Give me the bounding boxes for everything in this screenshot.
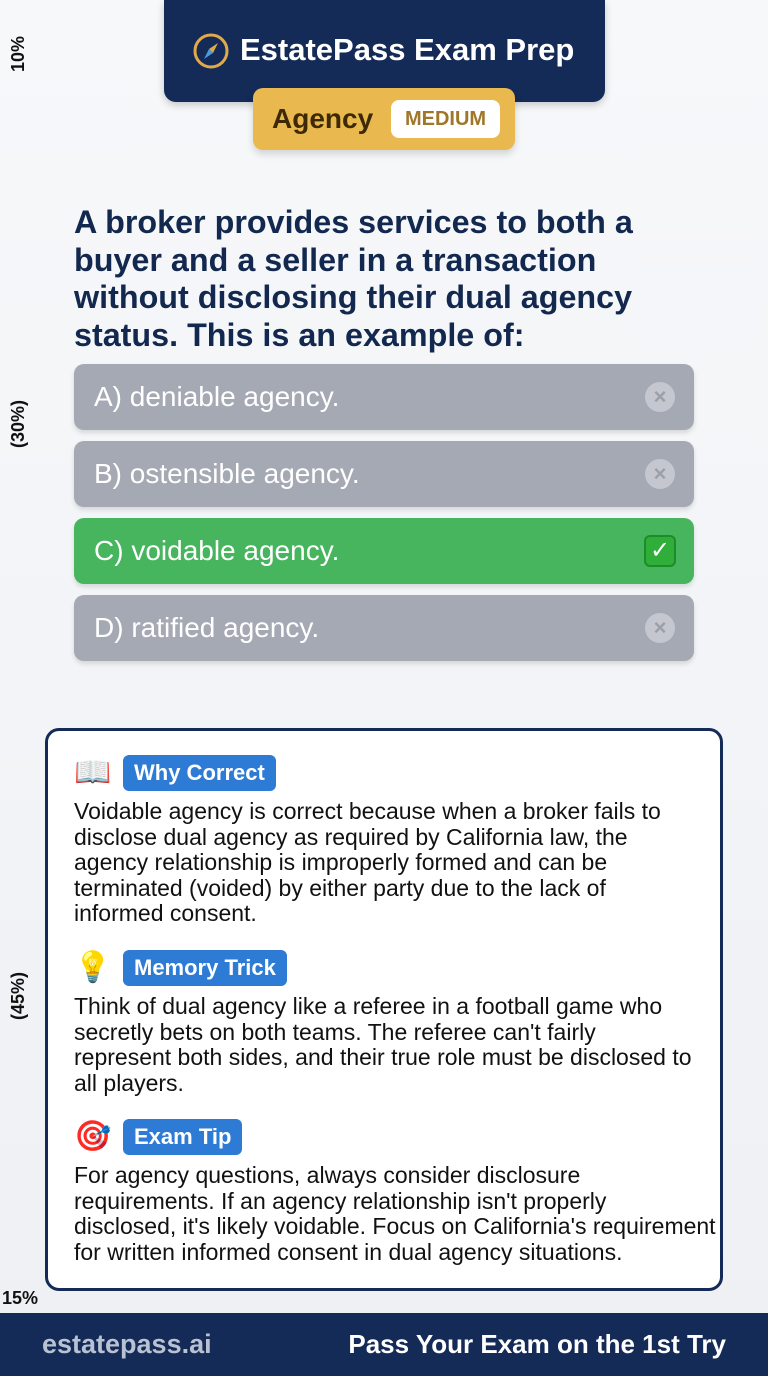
heading: why correct: 📖 — [74, 756, 111, 789]
heading: why correct — [74, 755, 276, 791]
option C correct: ✓ — [650, 537, 670, 564]
heading: memory trick — [74, 950, 287, 986]
category badge: Agency — [272, 103, 373, 134]
option C correct — [74, 518, 694, 584]
header banner — [164, 0, 605, 102]
option D: D) ratified agency. — [94, 612, 319, 643]
text: exam tip: For agency questions, always consider disclosure — [74, 1162, 580, 1188]
question: status. This is an example of: — [74, 316, 524, 352]
option C correct: C) voidable agency. — [94, 535, 339, 566]
explanation panel — [45, 728, 723, 1291]
text: exam tip: disclosed, it's likely voidable. Focus on California's requirement — [74, 1213, 716, 1239]
side label: 10%: 10% — [8, 36, 28, 72]
text: why correct: Voidable agency is correct because when a broker fails to — [74, 798, 661, 824]
text: exam tip — [74, 1162, 716, 1265]
text: why correct: informed consent. — [74, 900, 257, 926]
text: memory trick: Think of dual agency like a referee in a football game who — [74, 993, 662, 1019]
footer — [0, 1313, 768, 1376]
question: A broker provides services to both a — [74, 204, 633, 240]
option D: × — [654, 615, 666, 640]
option B: × — [654, 461, 666, 486]
text: exam tip: requirements. If an agency relationship isn't properly — [74, 1188, 606, 1214]
question: buyer and a seller in a transaction — [74, 242, 596, 278]
heading: memory trick: 💡 — [74, 951, 111, 984]
footer: estatepass.ai — [42, 1329, 212, 1359]
question: without disclosing their dual agency — [74, 279, 632, 315]
icon: compass — [194, 34, 228, 68]
difficulty pill: MEDIUM — [405, 108, 486, 130]
heading: exam tip: Exam Tip — [134, 1124, 231, 1149]
text: memory trick: all players. — [74, 1070, 184, 1096]
text: why correct: disclose dual agency as required by California law, the — [74, 824, 628, 850]
side label: 45%: (45%) — [8, 972, 28, 1020]
question — [74, 204, 634, 352]
footer: Pass Your Exam on the 1st Try — [348, 1329, 726, 1359]
text: memory trick: represent both sides, and their true role must be disclosed to — [74, 1044, 692, 1070]
heading: why correct: Why Correct — [134, 760, 265, 785]
text: why correct — [74, 798, 661, 926]
heading: exam tip: 🎯 — [74, 1120, 111, 1153]
text: memory trick: secretly bets on both teams. The referee can't fairly — [74, 1018, 596, 1044]
title: EstatePass Exam Prep — [240, 32, 574, 67]
difficulty pill — [391, 100, 500, 138]
text: memory trick — [74, 993, 692, 1096]
text: why correct: agency relationship is improperly formed and can be — [74, 849, 607, 875]
option A: × — [654, 384, 666, 409]
option B: B) ostensible agency. — [94, 458, 360, 489]
option A — [74, 364, 694, 430]
category badge — [253, 88, 515, 150]
option A: A) deniable agency. — [94, 381, 339, 412]
heading: memory trick: Memory Trick — [134, 955, 276, 980]
side label: 15%: 15% — [2, 1288, 38, 1308]
text: why correct: terminated (voided) by either party due to the lack of — [74, 874, 606, 900]
option B — [74, 441, 694, 507]
text: exam tip: for written informed consent in dual agency situations. — [74, 1238, 622, 1264]
option D — [74, 595, 694, 661]
heading: exam tip — [74, 1119, 242, 1155]
side label: 30%: (30%) — [8, 400, 28, 448]
